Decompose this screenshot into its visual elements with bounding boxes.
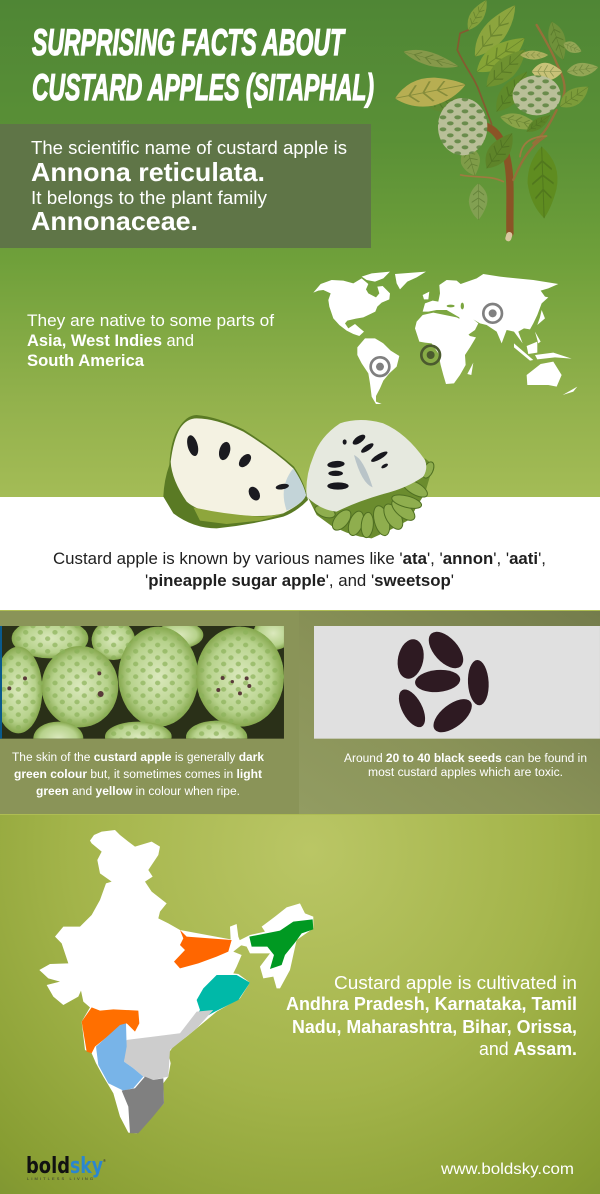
right half: [306, 420, 436, 538]
logo: boldsky: [26, 1154, 106, 1181]
map marker: West Indies: [421, 346, 440, 364]
background: top green gradient: [0, 0, 600, 498]
caption: skin colour: The skin of the custard apple is generally dark: [12, 752, 265, 764]
text: other names: [53, 549, 546, 590]
leaves: [392, 0, 599, 220]
photo: whole custard apples: [0, 617, 293, 755]
state: Tamil Nadu: [122, 1077, 164, 1133]
text: native regions: They are native to some parts of: [27, 311, 274, 330]
state: Andhra Pradesh: [124, 1010, 213, 1080]
logo: boldsky: ®: [103, 1158, 106, 1163]
text: cultivation states: and Assam.: [479, 1039, 577, 1059]
panel: skin colour: [0, 611, 299, 815]
background: lower green gradient: [0, 815, 600, 1194]
map outline: [39, 830, 313, 1133]
website url: www.boldsky.com: [440, 1161, 574, 1178]
panel: scientific name: [0, 124, 371, 248]
state: Maharashtra: [82, 1007, 139, 1053]
title: CUSTARD APPLES (SITAPHAL): [32, 67, 374, 108]
text: cultivation states: Nadu, Maharashtra, Bihar, Orissa,: [292, 1017, 577, 1037]
text: native regions: Asia, West Indies and: [27, 331, 194, 350]
continents: [313, 272, 577, 404]
state: Assam: [249, 919, 313, 969]
world map: [313, 272, 577, 404]
text: native regions: South America: [27, 351, 145, 370]
photo: seeds: [314, 626, 600, 739]
illustration: custard apple branch: [392, 0, 599, 238]
caption: seeds: [344, 753, 587, 779]
rule below panels: [0, 814, 600, 815]
logo: boldsky: sky: [70, 1154, 103, 1179]
state: Bihar: [174, 930, 232, 968]
rule above panels: [0, 610, 600, 611]
caption: seeds: Around 20 to 40 black seeds can be found in: [344, 753, 587, 765]
caption: skin colour: green colour but, it sometimes comes in light: [14, 769, 262, 781]
photo: halved custard apples: [163, 415, 436, 538]
text: cultivation states: Andhra Pradesh, Karnataka, Tamil: [286, 994, 577, 1014]
state: Orissa: [193, 975, 250, 1022]
text: scientific name: It belongs to the plant family: [31, 187, 268, 208]
state: Karnataka: [96, 1023, 143, 1091]
white names band background: [0, 497, 600, 610]
title: SURPRISING FACTS ABOUT: [32, 22, 346, 63]
map marker: South America: [371, 357, 389, 376]
inland seas: [447, 303, 464, 309]
text: cultivation states: Custard apple is cultivated in: [334, 973, 577, 993]
map marker: Asia: [483, 304, 502, 323]
caption: seeds: most custard apples which are toxic.: [368, 767, 563, 779]
left half: [163, 415, 308, 528]
caption: skin colour: green and yellow in colour when ripe.: [36, 786, 240, 798]
text: cultivation states: [286, 973, 577, 1059]
title: [32, 22, 374, 108]
panel: black seeds: [299, 611, 600, 815]
logo: boldsky: LIMITLESS LIVING: [27, 1176, 93, 1181]
fruit: small: [513, 75, 561, 115]
text: native regions: [27, 311, 274, 370]
india map: [39, 830, 313, 1133]
text: other names: 'pineapple sugar apple', and 'sweetsop': [145, 571, 454, 590]
branches: [457, 25, 565, 238]
text: scientific name: Annona reticulata.: [31, 157, 265, 187]
fruit: large: [438, 98, 487, 155]
text: other names: Custard apple is known by various names like 'ata', 'annon', 'aati',: [53, 549, 546, 568]
logo: boldsky: bold: [26, 1154, 70, 1179]
text: scientific name: The scientific name of custard apple is: [31, 137, 347, 158]
caption: skin colour: [12, 752, 265, 798]
text: scientific name: [31, 137, 347, 236]
text: scientific name: Annonaceae.: [31, 206, 198, 236]
